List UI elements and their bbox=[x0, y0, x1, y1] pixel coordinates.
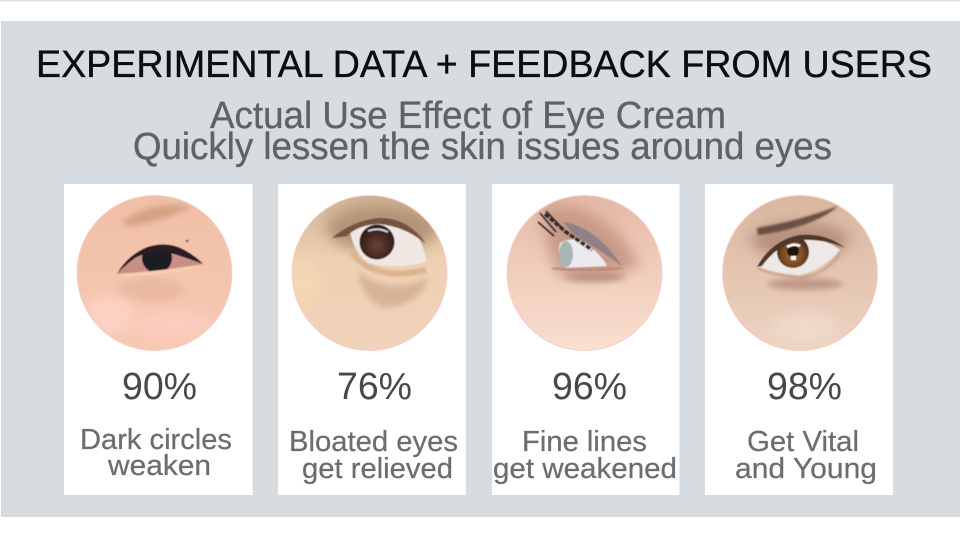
label: fine lines get weakened bbox=[493, 426, 677, 485]
top hairline bbox=[0, 0, 960, 2]
icon: eye photo with bloated under-eye bbox=[292, 195, 448, 351]
percentage: 96%: 96% bbox=[552, 366, 627, 408]
label: dark circles weaken: Dark circles bbox=[80, 424, 232, 456]
label: bloated eyes get relieved: get relieved bbox=[302, 453, 453, 485]
icon: young healthy eye photo bbox=[722, 195, 878, 351]
subtitle: Actual Use Effect of Eye Cream bbox=[210, 95, 726, 137]
icon: eye photo with fine lines bbox=[506, 195, 662, 351]
percentage: 98%: 98% bbox=[767, 366, 842, 408]
label: dark circles weaken bbox=[80, 424, 232, 482]
subtitle bbox=[133, 95, 832, 168]
label: get vital and young: Get Vital bbox=[747, 426, 859, 458]
label: get vital and young bbox=[735, 426, 877, 485]
panel: dark circles bbox=[64, 184, 252, 495]
icon: eye photo with dark circles bbox=[76, 195, 232, 351]
label: get vital and young: and Young bbox=[735, 453, 877, 485]
panel: bloated eyes bbox=[278, 184, 466, 495]
label: fine lines get weakened: get weakened bbox=[493, 453, 677, 485]
title: EXPERIMENTAL DATA + FEEDBACK FROM USERS bbox=[36, 44, 932, 86]
label: bloated eyes get relieved bbox=[289, 426, 458, 485]
label: bloated eyes get relieved: Bloated eyes bbox=[289, 426, 458, 458]
label: fine lines get weakened: Fine lines bbox=[522, 426, 647, 458]
subtitle: Quickly lessen the skin issues around eyes bbox=[133, 126, 832, 168]
panel: fine lines bbox=[492, 184, 680, 495]
percentage: 90%: 90% bbox=[122, 366, 197, 408]
panel: vital and young bbox=[705, 184, 893, 495]
label: dark circles weaken: weaken bbox=[107, 450, 211, 482]
percentage: 76%: 76% bbox=[337, 366, 412, 408]
